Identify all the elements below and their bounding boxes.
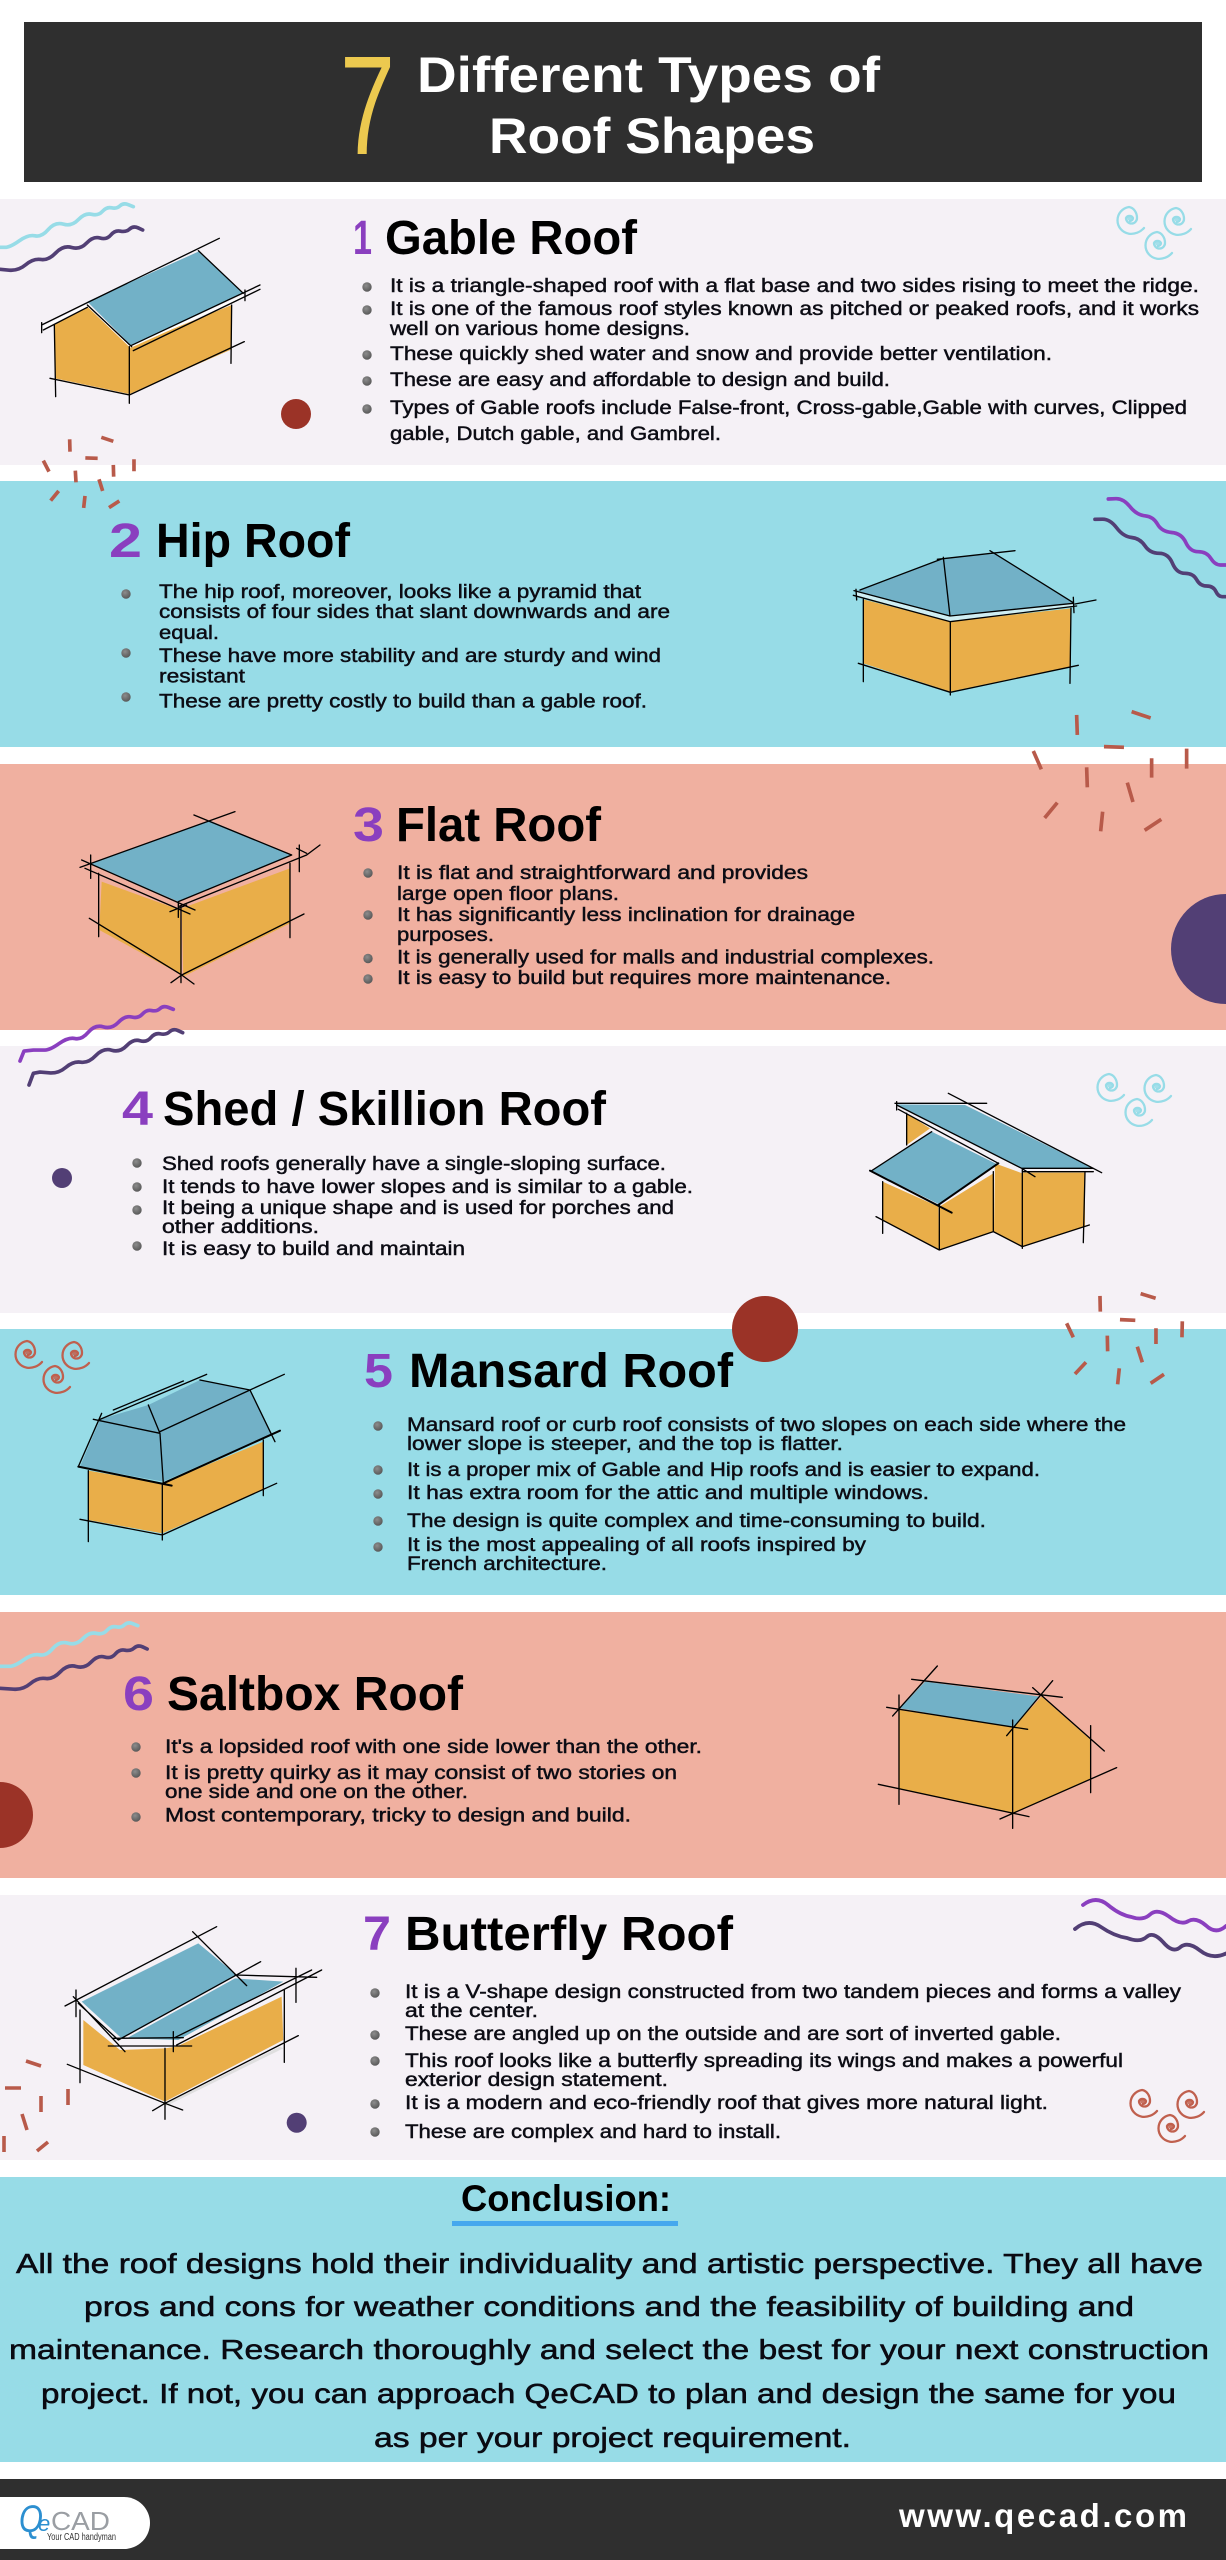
bullet list <box>363 863 934 989</box>
decorative dashes <box>43 437 134 508</box>
decorative swirls <box>1131 2090 1204 2142</box>
heading: 4 Shed / Skillion Roof: Shed / Skillion Roof <box>163 1083 607 1136</box>
decorative dashes <box>4 2061 68 2152</box>
conclusion heading: Conclusion: <box>461 2178 671 2219</box>
bullet list: purposes. <box>397 925 494 946</box>
heading: 4 Shed / Skillion Roof: 4 <box>122 1083 153 1136</box>
panel: saltbox roof background <box>0 1612 1226 1878</box>
icon: mansard house <box>78 1374 284 1542</box>
conclusion underline <box>452 2221 678 2226</box>
logo: e <box>38 2511 50 2536</box>
bullet list <box>370 1982 1182 2143</box>
bullet list: gable, Dutch gable, and Gambrel. <box>390 424 721 445</box>
heading: 5 Mansard Roof: Mansard Roof <box>409 1345 734 1398</box>
bullet list: These are angled up on the outside and are sort of inverted gable. <box>405 2024 1061 2045</box>
bullet list: It has significantly less inclination for drainage <box>397 905 855 926</box>
bullet list: Most contemporary, tricky to design and build. <box>165 1806 631 1826</box>
panel: shed roof background <box>0 1046 1226 1313</box>
decorative swirls <box>1098 1074 1171 1126</box>
bullet list: It has extra room for the attic and multiple windows. <box>407 1483 929 1504</box>
footer <box>0 2479 1226 2560</box>
title text: Roof Shapes <box>489 108 815 164</box>
bullet list: consists of four sides that slant downwards and are <box>159 602 670 623</box>
bullet list <box>132 1154 693 1260</box>
conclusion text: as per your project requirement. <box>374 2422 851 2453</box>
bullet list: It tends to have lower slopes and is similar to a gable. <box>162 1177 693 1198</box>
bullet list: It's a lopsided roof with one side lower than the other. <box>165 1737 702 1758</box>
bullet list: These are pretty costly to build than a gable roof. <box>159 692 647 712</box>
bullet list: It is easy to build but requires more maintenance. <box>397 968 891 989</box>
decorative dot <box>52 1168 72 1188</box>
logo: Q <box>19 2499 43 2541</box>
decorative dot <box>281 399 311 429</box>
icon: gable house <box>42 238 260 403</box>
section 5: mansard roof <box>16 1294 1182 1575</box>
title banner <box>24 22 1202 184</box>
bullet list: It is flat and straightforward and provides <box>397 863 808 884</box>
icon: saltbox house <box>878 1666 1117 1828</box>
heading: 3 Flat Roof: 3 <box>353 799 384 852</box>
section 1: gable roof <box>0 204 1199 508</box>
bullet list <box>373 1415 1126 1575</box>
heading: 1 Gable Roof: 1 <box>353 212 372 265</box>
heading: 7 Butterfly Roof: Butterfly Roof <box>405 1908 734 1961</box>
icon: butterfly house <box>65 1927 322 2119</box>
bullet list: French architecture. <box>407 1554 607 1575</box>
bullet list: The hip roof, moreover, looks like a pyramid that <box>159 582 642 603</box>
icon: shed house <box>870 1093 1102 1250</box>
panel: hip roof background <box>0 481 1226 747</box>
decorative circle <box>1171 894 1226 1004</box>
heading: 5 Mansard Roof: 5 <box>364 1345 393 1398</box>
decorative waves <box>1095 499 1226 597</box>
bullet list: It is the most appealing of all roofs inspired by <box>407 1535 867 1556</box>
section 3: flat roof <box>80 712 1226 1004</box>
bullet list: These quickly shed water and snow and provide better ventilation. <box>390 344 1052 365</box>
title text: Different Types of <box>417 47 880 103</box>
decorative circle <box>732 1296 798 1362</box>
decorative waves <box>1075 1900 1226 1956</box>
bullet list: These are complex and hard to install. <box>405 2122 781 2143</box>
heading: 3 Flat Roof: Flat Roof <box>396 799 602 852</box>
heading: 6 Saltbox Roof: 6 <box>123 1668 154 1721</box>
title number 7: 7 <box>340 26 395 184</box>
bullet list: It is a modern and eco-friendly roof that gives more natural light. <box>405 2093 1048 2114</box>
heading: 2 Hip Roof: Hip Roof <box>156 515 351 568</box>
panel: flat roof background <box>0 764 1226 1030</box>
panel: butterfly roof background <box>0 1895 1226 2160</box>
website url: www.qecad.com <box>898 2497 1187 2534</box>
decorative dashes <box>1033 712 1187 831</box>
bullet list: It is one of the famous roof styles known as pitched or peaked roofs, and it works <box>390 299 1199 320</box>
section 4: shed roof <box>20 1007 1171 1260</box>
bullet list: one side and one on the other. <box>165 1782 468 1803</box>
bullet list: exterior design statement. <box>405 2070 668 2091</box>
conclusion text: maintenance. Research thoroughly and select the best for your next construction <box>9 2334 1209 2365</box>
bullet list: It is pretty quirky as it may consist of two stories on <box>165 1763 677 1784</box>
heading: 6 Saltbox Roof: Saltbox Roof <box>167 1668 464 1721</box>
panel: mansard roof background <box>0 1329 1226 1595</box>
bullet list <box>121 582 670 712</box>
section 6: saltbox roof <box>0 1623 1117 1848</box>
bullet list: lower slope is steeper, and the top is flatter. <box>407 1434 843 1455</box>
bullet list: Mansard roof or curb roof consists of two slopes on each side where the <box>407 1415 1126 1436</box>
bullet list: These are easy and affordable to design and build. <box>390 370 890 391</box>
decorative swirls <box>1118 207 1191 259</box>
bullet list: It is a triangle-shaped roof with a flat base and two sides rising to meet the ridge. <box>390 276 1199 297</box>
decorative waves <box>0 204 143 270</box>
icon: hip house <box>853 551 1096 695</box>
bullet list: large open floor plans. <box>397 884 619 905</box>
bullet list: Shed roofs generally have a single-sloping surface. <box>162 1154 666 1175</box>
conclusion text <box>9 2248 1209 2453</box>
conclusion text: All the roof designs hold their individuality and artistic perspective. They all have <box>16 2248 1203 2279</box>
logo <box>0 2497 150 2549</box>
heading: 2 Hip Roof: 2 <box>109 515 142 568</box>
title text <box>417 47 880 164</box>
bullet list: It is a proper mix of Gable and Hip roofs and is easier to expand. <box>407 1460 1040 1481</box>
bullet list: well on various home designs. <box>389 319 690 340</box>
bullet list <box>131 1737 702 1826</box>
decorative waves <box>0 1623 147 1689</box>
bullet list: resistant <box>159 666 246 688</box>
decorative swirls <box>16 1341 89 1393</box>
conclusion text: project. If not, you can approach QeCAD to plan and design the same for you <box>41 2378 1176 2409</box>
logo: CAD <box>51 2506 110 2536</box>
decorative waves <box>20 1007 183 1085</box>
bullet list: These have more stability and are sturdy and wind <box>159 646 661 667</box>
heading: 1 Gable Roof: Gable Roof <box>385 212 638 265</box>
bullet list: equal. <box>159 623 219 644</box>
logo: Your CAD handyman <box>47 2532 116 2543</box>
heading: 7 Butterfly Roof: 7 <box>363 1908 391 1961</box>
bullet list: Types of Gable roofs include False-front, Cross-gable,Gable with curves, Clipped <box>390 398 1187 419</box>
conclusion <box>9 2178 1209 2453</box>
icon: flat house <box>80 812 320 984</box>
bullet list: other additions. <box>162 1217 319 1238</box>
section 7: butterfly roof <box>4 1900 1226 2152</box>
panel: conclusion background <box>0 2177 1226 2462</box>
bullet list: It being a unique shape and is used for porches and <box>162 1198 674 1219</box>
conclusion text: pros and cons for weather conditions and the feasibility of building and <box>84 2291 1134 2322</box>
bullet list: The design is quite complex and time-consuming to build. <box>407 1511 986 1532</box>
bullet list: It is easy to build and maintain <box>162 1239 465 1260</box>
section 2: hip roof <box>109 499 1226 712</box>
bullet list: This roof looks like a butterfly spreading its wings and makes a powerful <box>405 2051 1123 2072</box>
decorative dashes <box>1067 1294 1182 1384</box>
bullet list: It is a V-shape design constructed from two tandem pieces and forms a valley <box>405 1982 1182 2003</box>
decorative dot <box>287 2113 307 2133</box>
decorative circle <box>0 1782 33 1848</box>
bullet list: at the center. <box>405 2001 538 2022</box>
panel: gable roof background <box>0 199 1226 465</box>
bullet list <box>362 276 1199 445</box>
bullet list: It is generally used for malls and industrial complexes. <box>397 948 934 968</box>
